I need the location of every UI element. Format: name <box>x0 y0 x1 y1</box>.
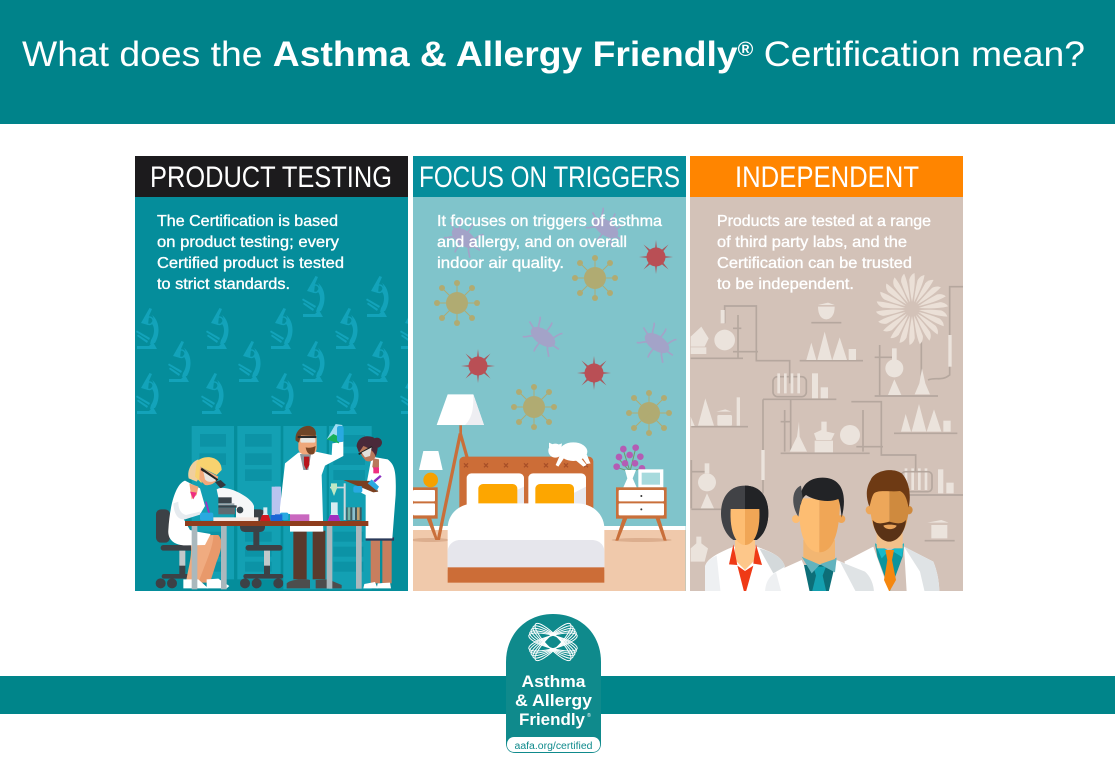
lab scene left part <box>156 426 283 589</box>
panel header: product testing: PRODUCT TESTING <box>150 161 392 194</box>
chairs <box>156 509 283 588</box>
scientist: woman with clipboard <box>343 436 396 588</box>
focus on triggers text: indoor air quality. <box>437 255 564 272</box>
panel: independent <box>690 156 963 593</box>
cabinets <box>283 426 372 589</box>
independent text: to be independent. <box>717 276 854 293</box>
lab table left <box>185 521 282 589</box>
cat <box>548 442 591 467</box>
focus on triggers text: It focuses on triggers of asthma <box>437 213 662 230</box>
red flask and cylinder <box>260 487 281 521</box>
lab cabinets <box>192 426 281 579</box>
certification badge <box>506 614 601 753</box>
lab microscope <box>213 480 258 521</box>
raised flask <box>327 424 344 443</box>
pillows <box>466 473 586 505</box>
badge wordmark: ® <box>587 712 591 719</box>
flower vase <box>613 444 645 487</box>
product testing text: The Certification is based <box>157 213 338 230</box>
bed <box>448 503 604 583</box>
right nightstand <box>615 487 667 541</box>
badge wordmark: & Allergy <box>515 692 593 710</box>
focus on triggers text: and allergy, and on overall <box>437 234 627 251</box>
pipes and shelves <box>691 287 963 541</box>
bedroom scene <box>410 394 686 592</box>
badge wordmark: Friendly <box>519 711 586 729</box>
title: ® <box>738 39 754 61</box>
panel header: focus on triggers: FOCUS ON TRIGGERS <box>419 161 680 194</box>
person: woman with dark hair <box>705 486 785 593</box>
top banner <box>0 0 1115 124</box>
sunburst <box>876 273 948 345</box>
headboard <box>459 457 593 513</box>
independent text: Products are tested at a range <box>717 213 931 230</box>
badge logo <box>527 620 579 664</box>
title: What does the Asthma & Allergy Friendly <box>22 35 709 74</box>
product testing text: to strict standards. <box>157 276 290 293</box>
panel header: independent: INDEPENDENT <box>735 161 919 194</box>
microscope pattern <box>136 276 423 414</box>
product testing text: Certified product is tested <box>157 255 344 272</box>
badge wordmark: Asthma <box>522 673 586 691</box>
title: Certification mean? <box>753 35 1085 74</box>
independent text <box>717 213 931 293</box>
independent text: Certification can be trusted <box>717 255 912 272</box>
flasks and glassware <box>691 303 954 562</box>
panel header: independent <box>690 156 963 197</box>
picture frame <box>638 469 663 487</box>
bottom band <box>0 676 1115 714</box>
panel header: focus on triggers <box>413 156 686 197</box>
product testing text <box>157 213 344 293</box>
lab table right <box>275 521 368 589</box>
badge wordmark <box>515 673 593 729</box>
floor <box>410 526 686 592</box>
product testing text: on product testing; every <box>157 234 339 251</box>
focus on triggers text <box>437 213 662 272</box>
independent text: of third party labs, and the <box>717 234 907 251</box>
allergen particles <box>434 203 683 436</box>
floor lamp <box>437 394 484 540</box>
table glassware <box>275 483 362 521</box>
lab scene right part <box>275 424 396 589</box>
left nightstand with lamp <box>413 451 443 540</box>
three scientists portraits <box>705 470 939 593</box>
scientist: seated woman <box>168 457 229 588</box>
person: central man <box>765 478 874 593</box>
badge url strip: aafa.org/certified <box>514 741 592 752</box>
person: bearded man <box>844 470 939 593</box>
panel: focus on triggers <box>410 156 686 592</box>
panel: product testing <box>135 156 423 591</box>
lab equipment backdrop <box>691 287 963 562</box>
scientist: standing man <box>279 426 343 588</box>
